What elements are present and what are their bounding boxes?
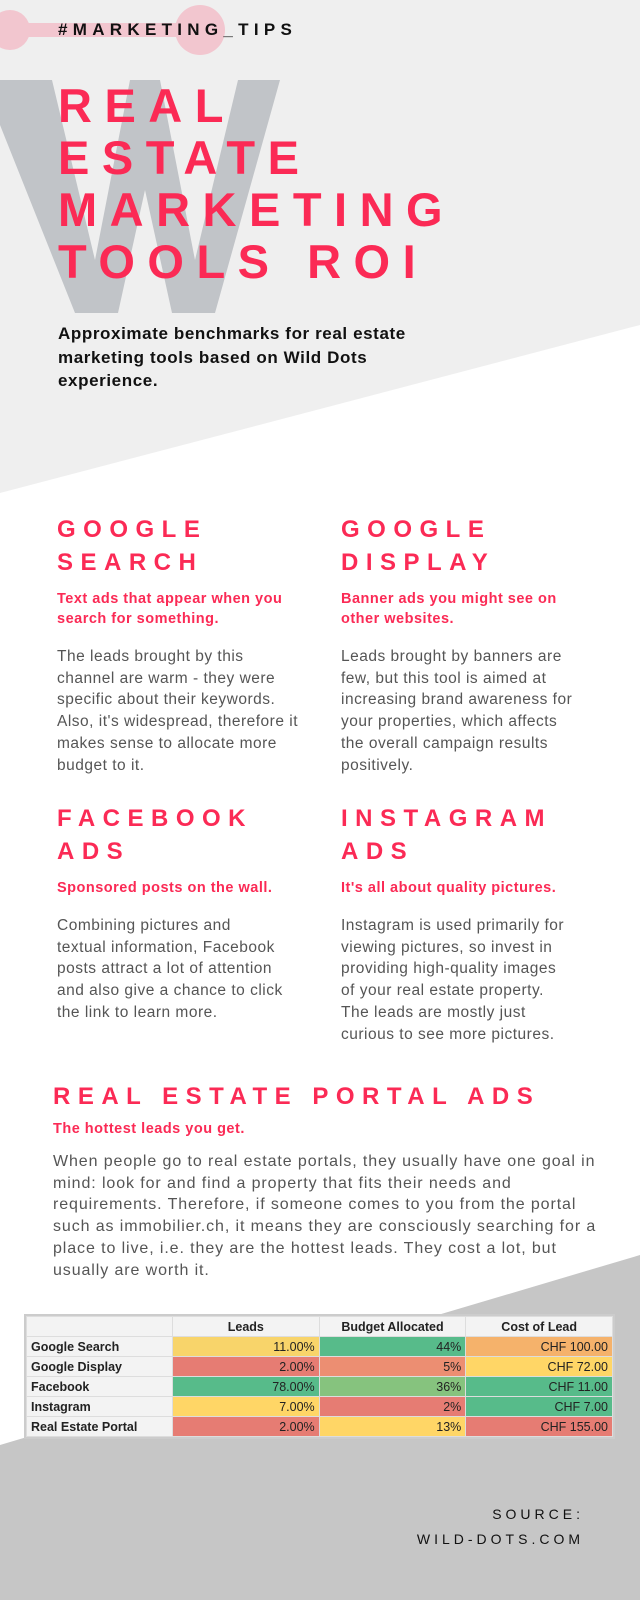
panel: facebook: posts attract a lot of attention xyxy=(57,960,272,977)
table: 11.00% xyxy=(273,1340,315,1354)
title: MARKETING xyxy=(58,183,455,236)
panel: google search: search for something. xyxy=(57,611,219,627)
panel: facebook xyxy=(57,805,283,1021)
panel: facebook: ADS xyxy=(57,838,130,865)
panel: facebook: the link to learn more. xyxy=(57,1004,218,1021)
panel: real estate portal: requirements. Therefore, if someone comes to you from the portal xyxy=(53,1196,576,1213)
tag: #MARKETING_TIPS xyxy=(58,20,297,39)
table: CHF 7.00 xyxy=(554,1400,608,1414)
panel: facebook: Combining pictures and xyxy=(57,917,231,934)
panel: real estate portal: When people go to real estate portals, they usually have one goal in xyxy=(53,1153,595,1170)
panel: google search: GOOGLE xyxy=(57,516,207,543)
panel: google search: Also, it's widespread, therefore it xyxy=(57,713,298,730)
source: SOURCE: xyxy=(492,1506,584,1522)
panel: google search: The leads brought by this xyxy=(57,648,244,665)
panel: google search: SEARCH xyxy=(57,549,203,576)
panel: google display: the overall campaign results xyxy=(341,735,548,752)
title xyxy=(58,79,455,288)
panel: google display: few, but this tool is aimed at xyxy=(341,670,546,687)
table: 36% xyxy=(436,1380,461,1394)
panel: google display: Leads brought by banners are xyxy=(341,648,562,665)
panel: google search: channel are warm - they were xyxy=(57,670,275,687)
table: Instagram xyxy=(31,1400,91,1414)
table: Facebook xyxy=(31,1380,89,1394)
panel: google search: specific about their keywords. xyxy=(57,691,275,708)
panel: google search: Text ads that appear when you xyxy=(57,591,282,607)
panel: google search xyxy=(57,516,298,774)
panel: instagram xyxy=(341,805,564,1043)
table: 7.00% xyxy=(279,1400,315,1414)
panel: instagram: The leads are mostly just xyxy=(341,1004,526,1021)
panel: google display: increasing brand awareness for xyxy=(341,691,572,708)
panel: facebook: FACEBOOK xyxy=(57,805,253,832)
panel: google search: budget to it. xyxy=(57,757,145,774)
panel: instagram: viewing pictures, so invest in xyxy=(341,939,552,956)
source xyxy=(417,1506,584,1547)
intro text: experience. xyxy=(58,371,158,390)
table: 5% xyxy=(443,1360,461,1374)
panel: real estate portal: REAL ESTATE PORTAL ADS xyxy=(53,1083,540,1110)
title: TOOLS ROI xyxy=(58,235,428,288)
source: WILD-DOTS.COM xyxy=(417,1531,584,1547)
table: 2.00% xyxy=(279,1360,315,1374)
panel: instagram: ADS xyxy=(341,838,414,865)
panel: instagram: INSTAGRAM xyxy=(341,805,552,832)
title: REAL xyxy=(58,79,236,132)
table: CHF 11.00 xyxy=(548,1380,608,1394)
table: 44% xyxy=(436,1340,461,1354)
table: CHF 155.00 xyxy=(541,1420,608,1434)
panel: facebook: and also give a chance to click xyxy=(57,982,283,999)
panel: google search: makes sense to allocate more xyxy=(57,735,277,752)
panel: real estate portal: place to live, i.e. they are the hottest leads. They cost a lot, but xyxy=(53,1240,557,1257)
panel: instagram: It's all about quality pictures. xyxy=(341,880,556,896)
table: CHF 100.00 xyxy=(541,1340,608,1354)
panel: instagram: curious to see more pictures. xyxy=(341,1026,555,1043)
table: 78.00% xyxy=(272,1380,315,1394)
table: Cost of Lead xyxy=(501,1320,577,1334)
table: 2.00% xyxy=(279,1420,315,1434)
panel: instagram: providing high-quality images xyxy=(341,960,556,977)
panel: google display: GOOGLE xyxy=(341,516,491,543)
panel: instagram: of your real estate property. xyxy=(341,982,544,999)
panel: real estate portal: such as immobilier.ch, it means they are consciously searching for a xyxy=(53,1218,596,1235)
table: CHF 72.00 xyxy=(548,1360,608,1374)
panel: google display: DISPLAY xyxy=(341,549,495,576)
table xyxy=(24,1314,615,1439)
table: Real Estate Portal xyxy=(31,1420,137,1434)
table: Budget Allocated xyxy=(341,1320,444,1334)
panel: real estate portal: usually are worth it. xyxy=(53,1262,210,1279)
intro text: Approximate benchmarks for real estate xyxy=(58,324,406,343)
panel: google display: your properties, which affects xyxy=(341,713,557,730)
panel: facebook: textual information, Facebook xyxy=(57,939,275,956)
panel: facebook: Sponsored posts on the wall. xyxy=(57,880,272,896)
table: 13% xyxy=(436,1420,461,1434)
table: 2% xyxy=(443,1400,461,1414)
title: ESTATE xyxy=(58,131,311,184)
panel: google display xyxy=(341,516,572,774)
intro text: marketing tools based on Wild Dots xyxy=(58,348,367,366)
intro text xyxy=(58,324,406,390)
panel: instagram: Instagram is used primarily for xyxy=(341,917,564,934)
table: Google Search xyxy=(31,1340,119,1354)
panel: real estate portal: The hottest leads you get. xyxy=(53,1121,245,1137)
table: Google Display xyxy=(31,1360,122,1374)
panel: google display: positively. xyxy=(341,757,413,774)
panel: real estate portal xyxy=(53,1083,596,1279)
panel: google display: Banner ads you might see on xyxy=(341,591,557,607)
panel: real estate portal: mind: look for and find a property that fits their needs and xyxy=(53,1175,512,1192)
table: Leads xyxy=(228,1320,264,1334)
panel: google display: other websites. xyxy=(341,611,454,627)
